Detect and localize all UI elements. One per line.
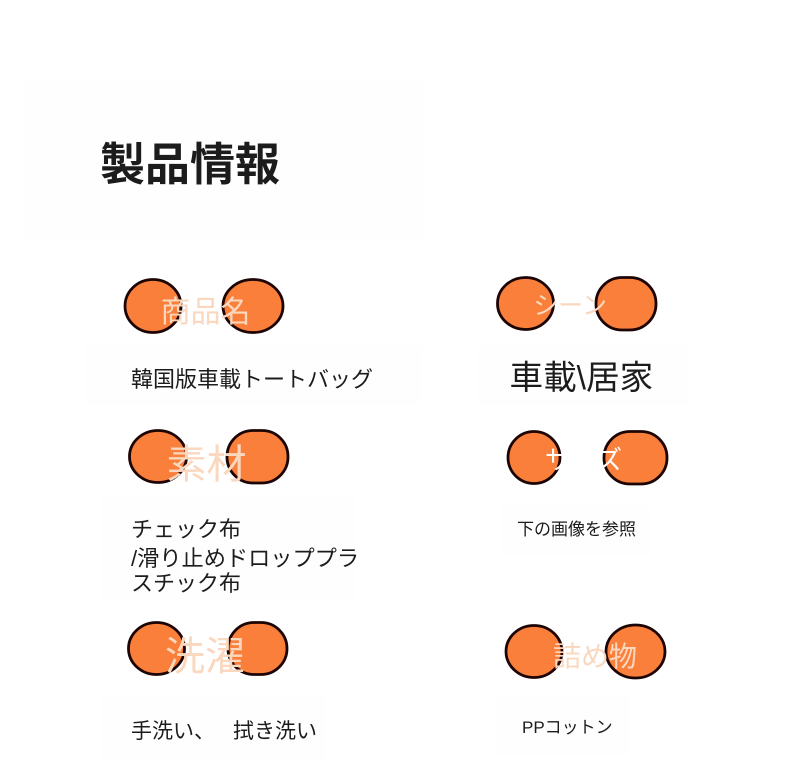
value: size: 下の画像を参照 [517, 520, 636, 539]
label: product name [125, 280, 283, 332]
label: scene: シーン [533, 292, 607, 320]
value: filling: PPコットン [522, 718, 613, 737]
label: filling [506, 625, 665, 678]
value: product name: 韓国版車載トートバッグ [131, 367, 373, 392]
label: material [130, 430, 288, 487]
value: washing: 手洗い、 [131, 720, 215, 743]
value: material: チェック布 [131, 517, 241, 542]
value: washing [131, 720, 317, 743]
label: material: 素材 [166, 443, 246, 487]
label: product name: 商品名 [160, 296, 250, 329]
label: scene [498, 278, 656, 330]
value: scene: 車載\居家 [510, 359, 653, 397]
label: size [508, 432, 667, 484]
label: washing [128, 622, 287, 679]
label: washing: 洗濯 [165, 635, 245, 679]
value: material: スチック布 [131, 571, 241, 596]
title: 製品情報 [100, 139, 280, 190]
value: material [131, 517, 359, 596]
value: washing: 拭き洗い [233, 720, 317, 743]
label: size: サイズ [545, 445, 622, 475]
label: filling: 詰め物 [553, 641, 637, 672]
value: material: /滑り止めドロッププラ [131, 546, 359, 571]
